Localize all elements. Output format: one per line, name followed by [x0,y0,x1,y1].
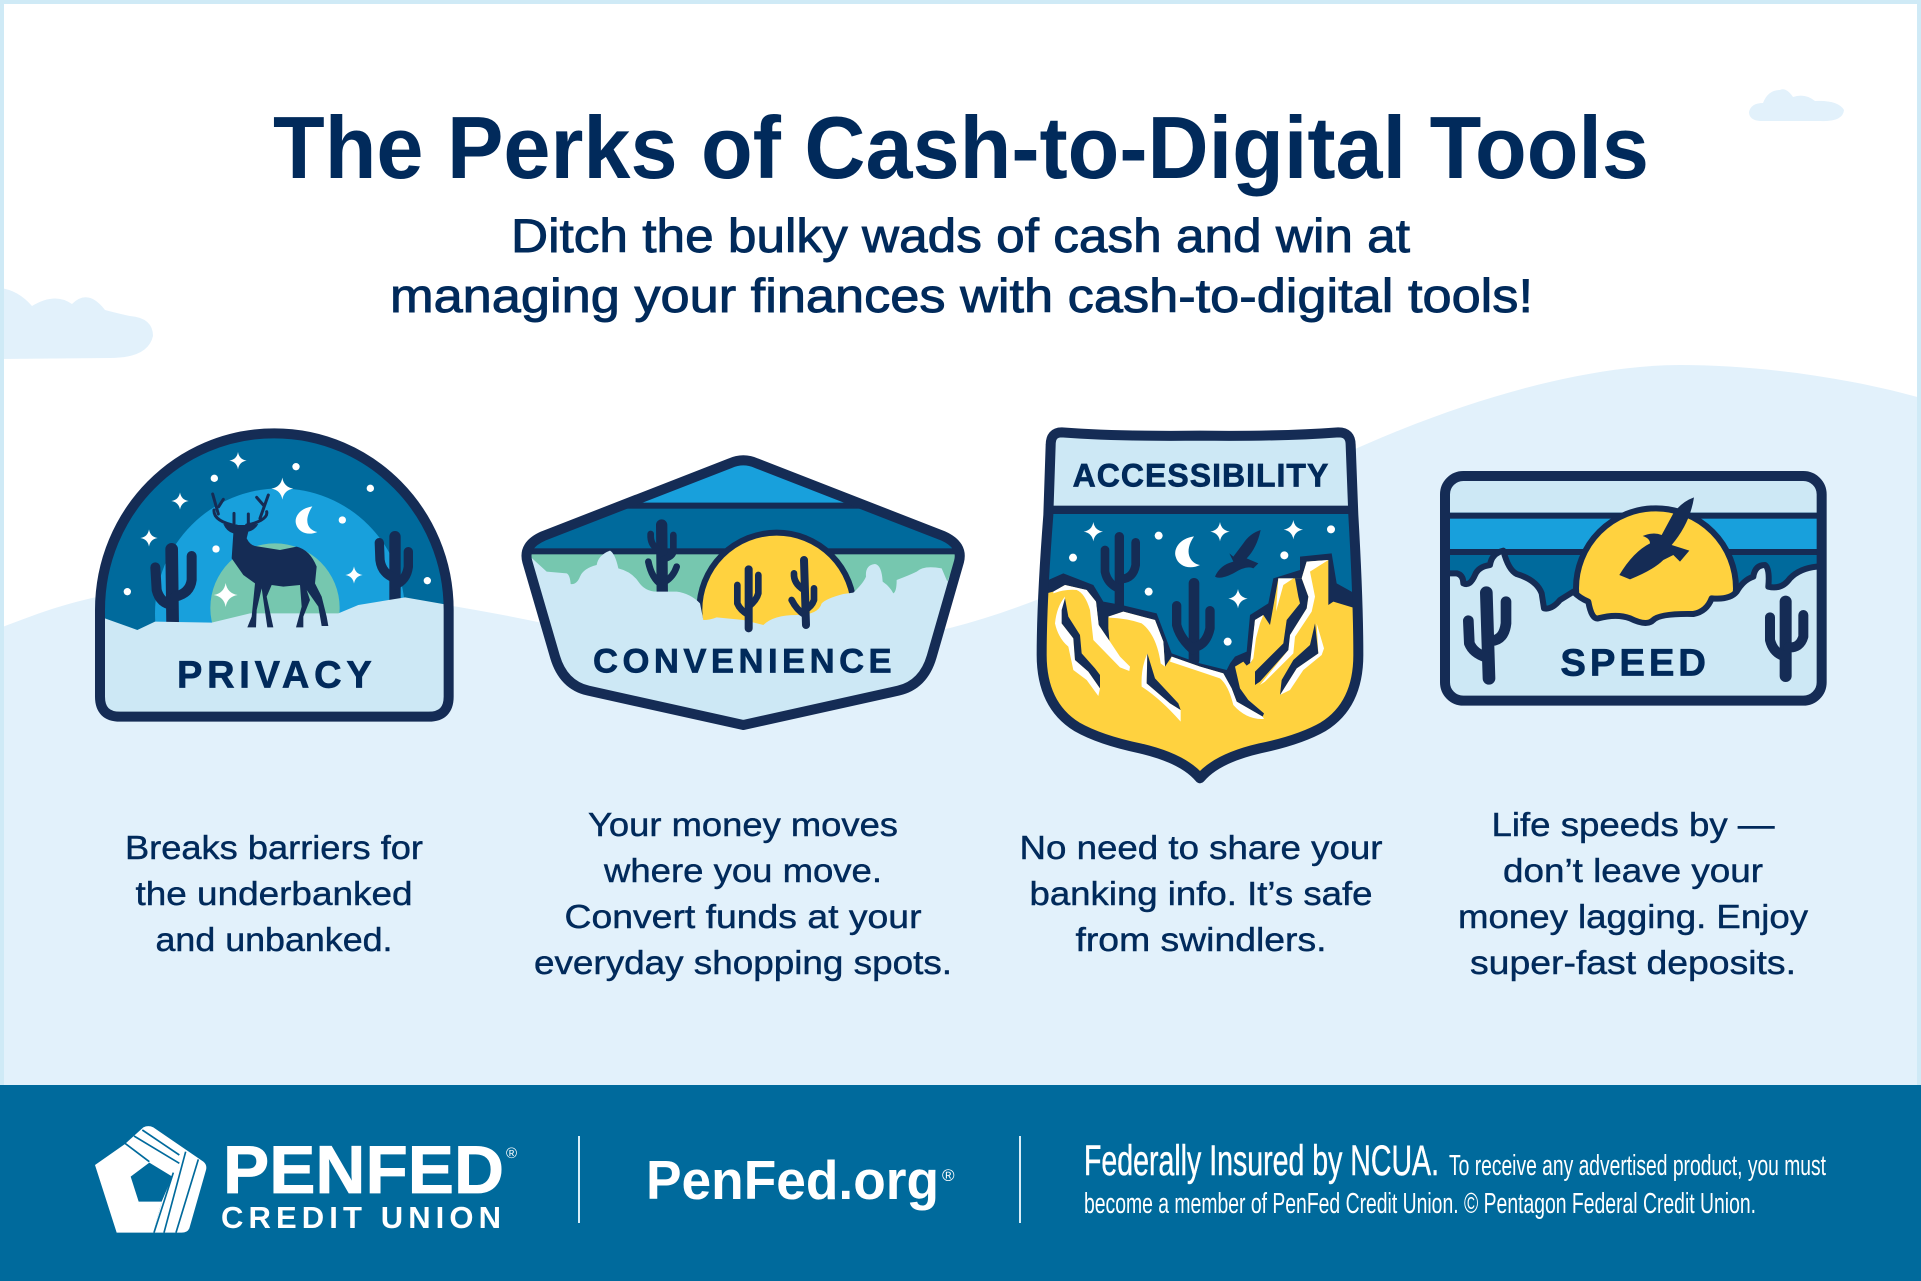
divider [578,1136,580,1223]
rock cracks [1062,578,1318,710]
title: The Perks of Cash-to-Digital Tools [273,98,1649,197]
text: disclaimer [1084,1137,1826,1220]
desert scene [532,465,955,720]
cloud: left [0,288,153,359]
logo: PenFed [95,1126,517,1235]
background hills [0,365,1921,1090]
icon: deer [213,494,328,627]
logo: PenFed: CREDIT UNION [221,1200,501,1235]
divider [1019,1136,1021,1223]
text: accessibility description: No need to share your [1020,829,1382,866]
footer band [0,1085,1921,1281]
stars [1069,520,1335,646]
text: accessibility description: banking info. It’s safe [1030,875,1372,912]
text: accessibility description: from swindlers. [1076,921,1326,958]
label: speed: SPEED [1560,641,1706,684]
text: convenience description: Convert funds at your [564,898,922,935]
text: disclaimer: Federally Insured by NCUA. [1084,1137,1439,1185]
icon: moon [296,506,317,534]
text: privacy description: Breaks barriers for [125,829,423,866]
icon: right cactus [1770,602,1803,676]
icon: pentagon mark [95,1126,206,1233]
text: privacy description: and unbanked. [156,921,392,958]
subtitle: managing your finances with cash-to-digital tools! [390,269,1533,322]
snow ground [100,597,449,720]
icon: cactus on horizon [648,525,677,599]
badge outline [1445,476,1822,701]
icon: eagle [1215,530,1261,578]
icon: moon [1175,536,1200,567]
icon: eagle [1619,497,1694,579]
snow ground [532,550,950,690]
cloud: top right [1749,89,1844,121]
icon: sun [697,530,855,625]
text: speed description: money lagging. Enjoy [1458,898,1809,935]
text: website: PenFed.org [646,1149,939,1211]
desert scene [1450,481,1817,696]
text: convenience description [534,806,952,981]
panel: convenience badge [520,453,967,733]
text: privacy description: the underbanked [136,875,412,912]
panel: speed badge [1440,470,1828,707]
logo: PenFed: ® [506,1145,517,1162]
night scene [105,438,444,712]
label: accessibility: ACCESSIBILITY [1073,457,1328,493]
canyon rocks [1046,560,1354,771]
text: convenience description: where you move. [603,852,882,889]
canyon outline silhouette [1048,553,1352,716]
badge outline [526,460,960,725]
icon: left cactus [155,549,192,627]
subtitle [390,209,1533,322]
badge outline [1042,432,1358,778]
text: privacy description [125,829,423,958]
canyon scene [1046,438,1354,771]
subtitle: Ditch the bulky wads of cash and win at [511,209,1410,262]
stars [124,452,431,607]
snow ground [1450,548,1817,672]
icon: right cactus [379,537,408,610]
text: speed description: super-fast deposits. [1470,944,1796,981]
text: speed description [1458,806,1809,981]
text: convenience description: everyday shopping spots. [534,944,952,981]
text: accessibility description [1020,829,1382,958]
text: speed description: Life speeds by — [1492,806,1774,843]
text: speed description: don’t leave your [1503,852,1763,889]
badge outline [100,433,449,717]
rock highlights [1053,560,1328,722]
icon: left cactus [1468,593,1506,678]
icon: canyon cacti [1105,537,1136,608]
text: website: ® [942,1166,955,1185]
icon: sun [1573,505,1739,620]
panel: privacy badge [93,427,457,738]
icon: sun cacti [737,569,758,628]
label: convenience: CONVENIENCE [593,642,892,680]
wordmark: PENFED [223,1132,504,1208]
text: convenience description: Your money moves [588,806,898,843]
panel: accessibility badge [1030,425,1367,782]
label: privacy: PRIVACY [177,655,372,697]
